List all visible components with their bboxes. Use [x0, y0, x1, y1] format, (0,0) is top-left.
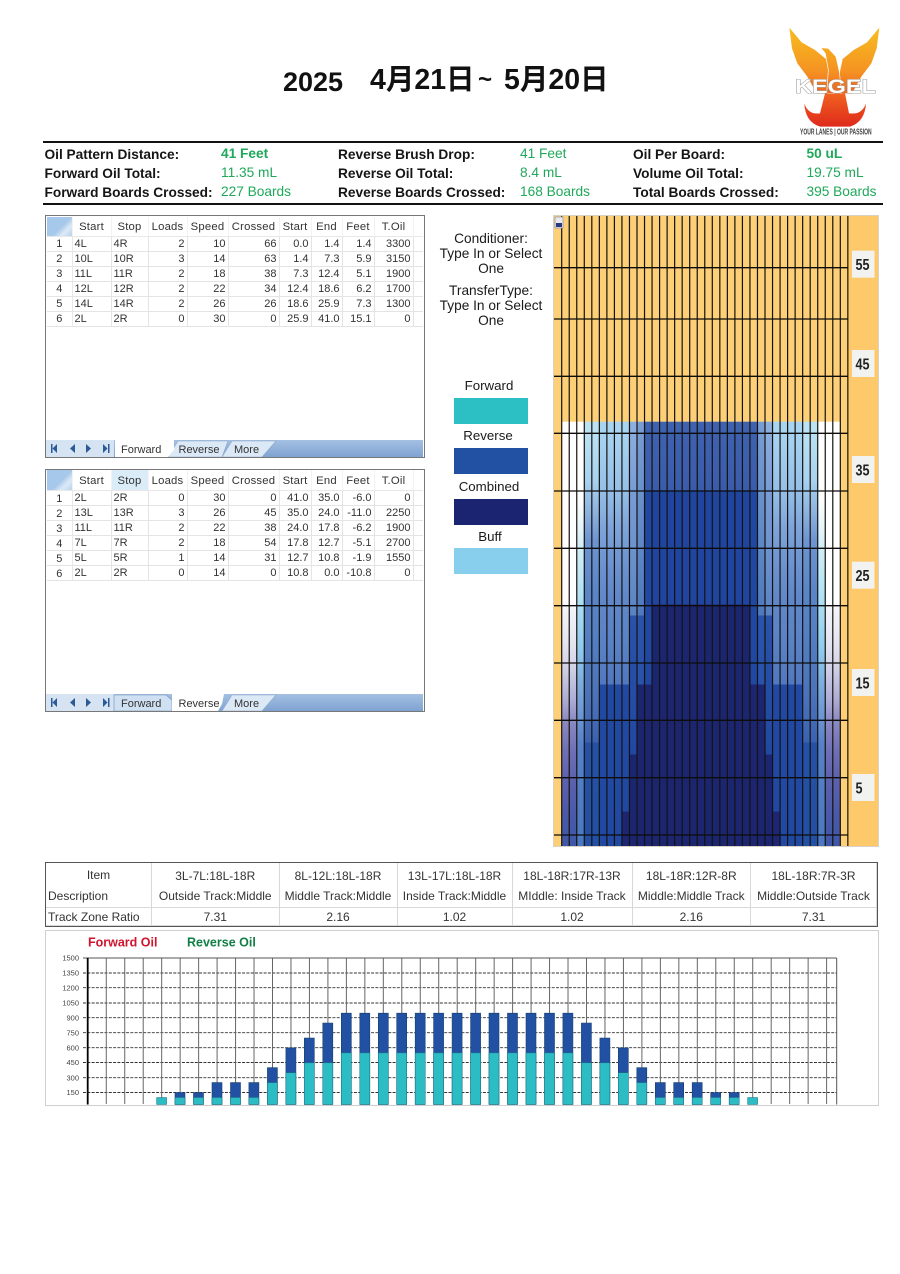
- reverse data table: 38: [264, 522, 276, 534]
- table: track zone ratio: Middle Track:Middle: [285, 889, 391, 903]
- table: track zone ratio: Middle:Outside Track: [757, 889, 870, 903]
- forward data table: 4: [56, 282, 62, 294]
- table: track zone ratio: 2.16: [680, 910, 703, 924]
- y axis labels: 450: [66, 1058, 79, 1067]
- forward data table: 2R: [114, 312, 128, 324]
- reverse data table: 1: [56, 492, 62, 504]
- forward data table: 1900: [386, 268, 410, 280]
- reverse data table: 24.0: [287, 522, 308, 534]
- forward data table: 3: [56, 268, 62, 280]
- reverse data table: 4: [56, 538, 62, 550]
- table: track zone ratio: 7.31: [204, 910, 227, 924]
- forward data table: T.Oil: [382, 221, 405, 233]
- distance labels: 15: [856, 676, 870, 692]
- reverse data table: 12.7: [287, 552, 308, 564]
- forward data table: 18.6: [287, 298, 308, 310]
- reverse data table: -10.8: [346, 566, 372, 578]
- reverse data table: [47, 470, 423, 581]
- text: transfer type: One: [478, 313, 504, 328]
- table: track zone ratio: 8L-12L:18L-18R: [295, 869, 381, 883]
- forward data table: 63: [264, 252, 276, 264]
- reverse data table: -6.2: [353, 522, 372, 534]
- year: 2025: [283, 67, 343, 97]
- bars: reverse oil: [175, 1013, 739, 1104]
- reverse data table: 1550: [386, 552, 410, 564]
- logo: Kegel phoenix: [789, 28, 880, 136]
- reverse data table: Start: [283, 475, 307, 487]
- text: conditioner: Type In or Select: [440, 246, 542, 261]
- forward data table: 7.3: [356, 298, 372, 310]
- forward data table: Stop: [117, 221, 142, 233]
- forward data table: 30: [213, 312, 226, 324]
- forward data table: Feet: [346, 221, 370, 233]
- forward data table: 12.4: [318, 268, 340, 280]
- legend swatch: reverse: [454, 448, 528, 474]
- text: conditioner: Conditioner:: [454, 231, 528, 246]
- reverse data table: 2: [178, 536, 184, 548]
- forward data table: 7.3: [293, 268, 308, 280]
- reverse data table: 7L: [74, 536, 87, 548]
- table: track zone ratio: Item: [87, 868, 110, 882]
- forward data table: 38: [264, 268, 276, 280]
- forward data table: 7.3: [324, 252, 340, 264]
- forward data table: 1700: [386, 282, 410, 294]
- reverse data table: 35.0: [318, 492, 340, 504]
- reverse data table: 0: [178, 492, 184, 504]
- distance labels: 25: [856, 568, 870, 585]
- reverse data table: 35.0: [287, 506, 308, 518]
- reverse data table: 17.8: [318, 522, 340, 534]
- oil columns: [562, 422, 840, 846]
- y axis labels: [62, 954, 79, 1097]
- y axis labels: 600: [66, 1043, 79, 1052]
- table: track zone ratio: 7.31: [802, 910, 825, 924]
- forward data table: 5: [56, 298, 62, 310]
- text: transfer type: [440, 283, 542, 328]
- forward data table: 11L: [74, 268, 92, 280]
- stat: forward boards crossed: [44, 184, 291, 200]
- forward data table: End: [316, 221, 337, 233]
- reverse data table: Stop: [117, 475, 142, 487]
- table: track zone ratio: Track Zone Ratio: [48, 910, 140, 924]
- forward data table: 26: [264, 298, 276, 310]
- tab bar: forward table: [46, 440, 423, 457]
- reverse data table: 3: [178, 506, 184, 518]
- y axis labels: 1200: [62, 983, 79, 992]
- forward data table: Start: [79, 221, 104, 233]
- stat: oil per board: [633, 146, 842, 162]
- table: track zone ratio: 13L-17L:18L-18R: [408, 869, 501, 883]
- reverse data table: 3: [56, 522, 62, 534]
- reverse data table: 0: [270, 566, 276, 578]
- forward data table: 4R: [114, 238, 128, 250]
- legend label: reverse: Reverse: [463, 428, 513, 443]
- stat: reverse oil total: Reverse Oil Total:: [338, 166, 453, 181]
- reverse data table: 17.8: [287, 536, 308, 548]
- stat: volume oil total: Volume Oil Total:: [633, 166, 744, 181]
- stat: total boards crossed: 395 Boards: [806, 184, 877, 199]
- forward data table: 14: [213, 252, 226, 264]
- table: track zone ratio: 18L-18R:17R-13R: [523, 869, 621, 883]
- reverse data table: 2L: [74, 566, 87, 578]
- text: conditioner: One: [478, 261, 504, 276]
- reverse data table: 7R: [114, 536, 128, 548]
- stat: oil pattern distance: [44, 146, 268, 162]
- stat: forward oil total: Forward Oil Total:: [44, 166, 161, 181]
- forward data table: 0: [178, 312, 184, 324]
- stat: forward boards crossed: Forward Boards Crossed:: [44, 185, 213, 200]
- forward data table: 22: [213, 282, 226, 294]
- reverse data table: Crossed: [232, 475, 275, 487]
- stat: reverse brush drop: [338, 146, 566, 162]
- table: track zone ratio: Description: [48, 888, 108, 902]
- distance labels: [852, 251, 874, 801]
- table: track zone ratio: Outside Track:Middle: [159, 889, 272, 903]
- forward data table: 1.4: [293, 252, 308, 264]
- y axis labels: 1350: [62, 968, 79, 978]
- reverse data table: 1: [178, 552, 184, 564]
- reverse data table: Feet: [346, 475, 370, 487]
- table: track zone ratio: 18L-18R:12R-8R: [646, 869, 737, 883]
- table: track zone ratio: 1.02: [443, 910, 466, 924]
- legend swatch: combined: [454, 499, 528, 525]
- reverse data table: Speed: [191, 475, 224, 487]
- forward data table: 3150: [386, 252, 410, 264]
- table: track zone ratio: Middle:Middle Track: [638, 889, 745, 903]
- stat: reverse brush drop: 41 Feet: [520, 146, 566, 161]
- forward data table: 6: [56, 312, 62, 324]
- reverse data table: End: [316, 475, 337, 487]
- stat: oil per board: 50 uL: [806, 146, 842, 161]
- forward data table: 1.4: [356, 238, 372, 250]
- stat: reverse brush drop: Reverse Brush Drop:: [338, 147, 475, 162]
- reverse data table: 2: [178, 522, 184, 534]
- chart: lane oil heat map: [553, 215, 879, 847]
- forward data table: 0.0: [293, 238, 308, 250]
- forward data table: 2: [178, 238, 184, 250]
- distance labels: 45: [856, 356, 870, 374]
- tab bar: forward table: Forward: [121, 444, 161, 456]
- reverse data table: 41.0: [287, 492, 308, 504]
- reverse data table: 0: [404, 566, 410, 578]
- legend swatch: forward: [454, 398, 528, 424]
- reverse data table: 18: [213, 536, 226, 548]
- reverse data table: T.Oil: [382, 475, 405, 487]
- reverse data table: 14: [213, 552, 226, 564]
- y axis labels: 300: [66, 1073, 79, 1082]
- forward data table: 10R: [114, 252, 134, 264]
- stat: reverse boards crossed: Reverse Boards Crossed:: [338, 185, 505, 200]
- stat: volume oil total: 19.75 mL: [806, 165, 864, 180]
- legend label: forward: Forward: [465, 378, 513, 393]
- reverse data table: 11L: [74, 522, 92, 534]
- text: transfer type: Type In or Select: [440, 298, 542, 313]
- reverse data table: 12.7: [318, 536, 340, 548]
- forward data table: [47, 217, 423, 327]
- forward data table: 0: [270, 312, 276, 324]
- forward data table: 2: [178, 268, 184, 280]
- table: track zone ratio: [45, 862, 878, 927]
- stat: oil per board: Oil Per Board:: [633, 147, 725, 162]
- legend label: combined: Combined: [459, 479, 519, 494]
- forward data table: 12R: [114, 282, 134, 294]
- reverse data table: 0: [270, 492, 276, 504]
- reverse data table: 5L: [74, 552, 87, 564]
- forward data table: 1.4: [324, 238, 340, 250]
- forward data table: 3: [178, 252, 184, 264]
- forward data table: 10: [213, 238, 226, 250]
- stat: forward oil total: 11.35 mL: [221, 165, 277, 180]
- tab bar: reverse table: Forward: [121, 698, 161, 710]
- stat: forward oil total: [44, 165, 277, 181]
- forward data table: 10L: [74, 252, 93, 264]
- reverse data table: 22: [213, 522, 226, 534]
- reverse data table: 2R: [114, 492, 128, 504]
- text: transfer type: TransferType:: [449, 283, 533, 298]
- reverse data table: -5.1: [353, 536, 372, 548]
- forward data table: 34: [264, 282, 276, 294]
- reverse data table: 14: [213, 566, 226, 578]
- legend swatch: buff: [454, 548, 528, 574]
- legend label: reverse oil: Reverse Oil: [187, 936, 256, 950]
- tilde: ~: [478, 66, 492, 93]
- reverse data table: 0.0: [324, 566, 340, 578]
- forward data table: 18: [213, 268, 226, 280]
- reverse data table: 13L: [74, 506, 93, 518]
- reverse data table: 2R: [114, 566, 128, 578]
- forward data table: 5.9: [356, 252, 372, 264]
- reverse data table: 45: [264, 506, 276, 518]
- reverse data table: 5: [56, 552, 62, 564]
- forward data table: 1300: [386, 298, 410, 310]
- text: conditioner: [440, 231, 542, 276]
- stat: reverse oil total: 8.4 mL: [520, 165, 562, 180]
- reverse data table: 2700: [386, 536, 410, 548]
- y axis labels: 150: [66, 1088, 79, 1097]
- forward data table: 2: [56, 252, 62, 264]
- y axis labels: 750: [66, 1028, 79, 1037]
- grid: [83, 958, 837, 1104]
- forward data table: 6.2: [356, 282, 372, 294]
- stat: oil pattern distance: Oil Pattern Distance:: [44, 147, 179, 162]
- reverse data table: 1900: [386, 522, 410, 534]
- legend label: forward oil: Forward Oil: [88, 936, 157, 950]
- stat: reverse boards crossed: 168 Boards: [520, 184, 590, 199]
- reverse data table: 10.8: [318, 552, 340, 564]
- forward data table: 18.6: [318, 282, 340, 294]
- forward data table: 0: [404, 312, 410, 324]
- reverse data table: 54: [264, 536, 276, 548]
- forward data table: 3300: [386, 238, 410, 250]
- forward data table: Speed: [191, 221, 224, 233]
- tab bar: forward table: Reverse: [178, 444, 219, 456]
- forward data table: 25.9: [318, 298, 340, 310]
- forward data table: 26: [213, 298, 226, 310]
- chart: oil per board bars: [45, 930, 879, 1106]
- stat: total boards crossed: [633, 184, 877, 200]
- reverse data table: 5R: [114, 552, 128, 564]
- reverse data table: 0: [178, 566, 184, 578]
- stat: reverse boards crossed: [338, 184, 590, 200]
- forward data table: Start: [283, 221, 307, 233]
- forward data table: 15.1: [350, 312, 372, 324]
- tab bar: forward table: More: [234, 444, 259, 456]
- forward data table: Crossed: [232, 221, 275, 233]
- reverse data table: 11R: [114, 522, 133, 534]
- forward data table: 4L: [74, 238, 87, 250]
- reverse data table: -11.0: [347, 506, 372, 518]
- stat: volume oil total: [633, 165, 864, 181]
- distance labels: 55: [856, 257, 870, 274]
- reverse data table: 2: [56, 508, 62, 520]
- y axis labels: 900: [66, 1013, 79, 1022]
- reverse data table: 2250: [386, 506, 410, 518]
- reverse data table: 13R: [114, 506, 134, 518]
- reverse data table: 31: [264, 552, 276, 564]
- reverse data table: 30: [213, 492, 226, 504]
- stat: forward boards crossed: 227 Boards: [221, 184, 291, 199]
- tab bar: reverse table: Reverse: [178, 698, 219, 710]
- dates: end: 5月20日: [504, 64, 609, 96]
- stat: reverse oil total: [338, 165, 562, 181]
- forward data table: 14L: [74, 298, 93, 310]
- reverse data table: 0: [404, 492, 410, 504]
- reverse data table: 10.8: [287, 566, 308, 578]
- forward data table: Loads: [152, 221, 183, 233]
- y axis labels: 1050: [62, 998, 79, 1008]
- forward data table: 5.1: [356, 268, 372, 280]
- distance labels: 5: [856, 780, 863, 798]
- dates: start: 4月21日: [370, 64, 475, 96]
- table: track zone ratio: 3L-7L:18L-18R: [175, 869, 255, 883]
- icon: corner marker: [555, 217, 563, 228]
- table: track zone ratio: MIddle: Inside Track: [518, 889, 626, 903]
- summary strip: oil statistics: [43, 141, 883, 205]
- reverse data table: -6.0: [353, 492, 372, 504]
- title: date range: [283, 64, 609, 97]
- tab bar: reverse table: More: [234, 698, 259, 710]
- forward data table: 2: [178, 282, 184, 294]
- reverse data table: 24.0: [318, 506, 340, 518]
- reverse data table: Start: [79, 475, 104, 487]
- reverse data table: 26: [213, 506, 226, 518]
- forward data table: 25.9: [287, 312, 308, 324]
- forward data table: 12L: [74, 282, 93, 294]
- forward data table: 14R: [114, 298, 134, 310]
- forward data table: 12.4: [287, 282, 308, 294]
- stat: oil pattern distance: 41 Feet: [221, 146, 268, 161]
- legend: oil colours: [454, 378, 528, 574]
- reverse data table: 6: [56, 568, 62, 580]
- logo: Kegel phoenix: KEGEL: [795, 77, 876, 98]
- panel: reverse table: [45, 469, 425, 712]
- forward data table: 2L: [74, 312, 87, 324]
- bars: forward oil: [157, 1053, 758, 1104]
- table: track zone ratio: Inside Track:Middle: [403, 889, 506, 903]
- table: track zone ratio: 18L-18R:7R-3R: [771, 869, 856, 883]
- forward data table: 2: [178, 298, 184, 310]
- legend label: buff: Buff: [478, 529, 502, 544]
- forward data table: 11R: [114, 268, 133, 280]
- table: track zone ratio: 1.02: [560, 910, 584, 924]
- forward data table: 1: [56, 238, 62, 250]
- tab bar: reverse table: [46, 694, 423, 711]
- panel: forward table: [45, 215, 425, 458]
- distance labels: 35: [856, 462, 870, 480]
- table: track zone ratio: 2.16: [326, 910, 350, 924]
- reverse data table: -1.9: [353, 552, 372, 564]
- stat: total boards crossed: Total Boards Crossed:: [633, 185, 779, 200]
- forward data table: 66: [264, 238, 276, 250]
- y axis labels: 1500: [62, 954, 79, 962]
- reverse data table: Loads: [152, 475, 183, 487]
- forward data table: 41.0: [318, 312, 340, 324]
- reverse data table: 2L: [74, 492, 87, 504]
